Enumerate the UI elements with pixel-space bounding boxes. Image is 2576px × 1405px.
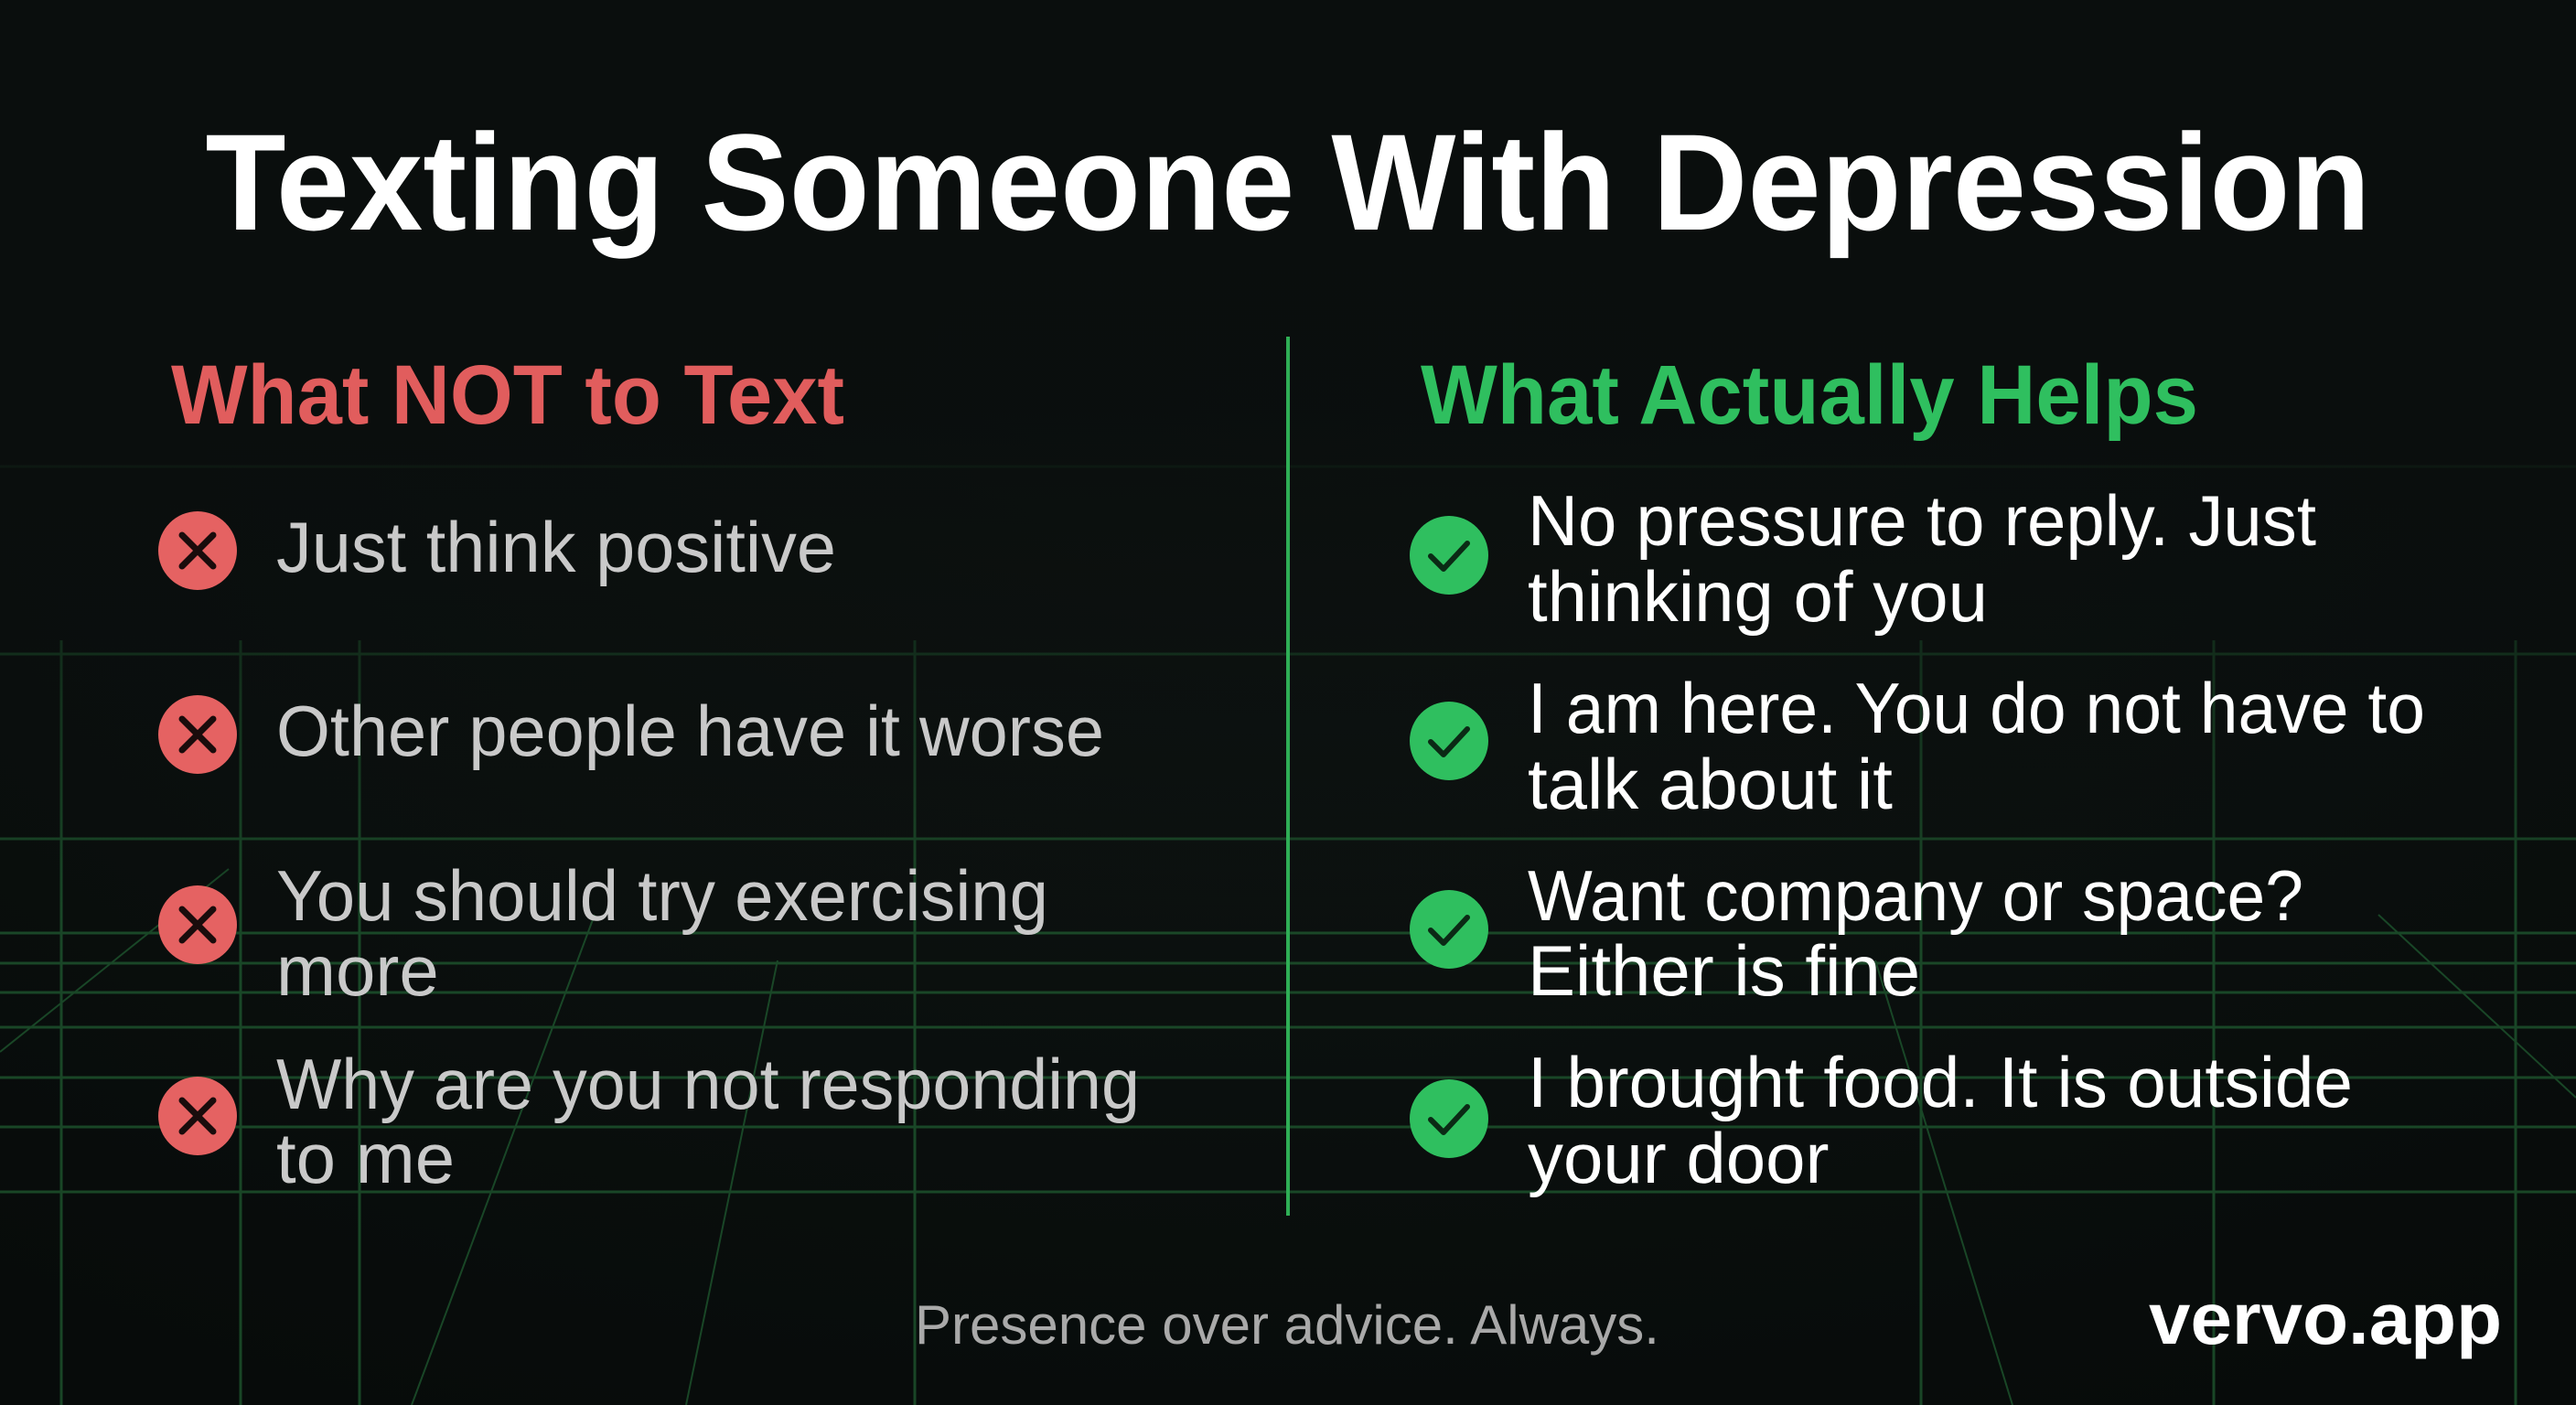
- title: Texting Someone With Depression: [205, 105, 2371, 259]
- panel: what actually helps: [1410, 349, 2425, 1198]
- item 3: [158, 855, 1048, 1011]
- item 4: your door: [1528, 1118, 1830, 1198]
- item 3: Want company or space?: [1528, 855, 2303, 936]
- item 2: Other people have it worse: [276, 691, 1104, 771]
- item 3: Either is fine: [1528, 930, 1920, 1011]
- brand: vervo.app: [2149, 1278, 2502, 1359]
- item 4: Why are you not responding: [276, 1044, 1140, 1124]
- heading: what not to text: What NOT to Text: [171, 349, 844, 442]
- item 3: You should try exercising: [276, 855, 1048, 936]
- item 3: more: [276, 930, 439, 1011]
- item 2: [1410, 668, 2425, 824]
- item 4: [158, 1044, 1140, 1198]
- item 1: No pressure to reply. Just: [1528, 480, 2316, 561]
- panel: what not to text: [158, 349, 1140, 1198]
- heading: what actually helps: What Actually Helps: [1421, 349, 2198, 442]
- item 1: [1410, 480, 2316, 637]
- item 4: I brought food. It is outside: [1528, 1042, 2353, 1122]
- item 2: I am here. You do not have to: [1528, 668, 2425, 748]
- item 1: Just think positive: [276, 507, 836, 587]
- item 4: to me: [276, 1118, 455, 1198]
- item 2: talk about it: [1528, 744, 1893, 824]
- item 4: [1410, 1042, 2353, 1198]
- divider: [1286, 337, 1290, 1216]
- item 1: thinking of you: [1528, 556, 1988, 637]
- item 3: [1410, 855, 2303, 1011]
- footer tagline: Presence over advice. Always.: [915, 1294, 1659, 1356]
